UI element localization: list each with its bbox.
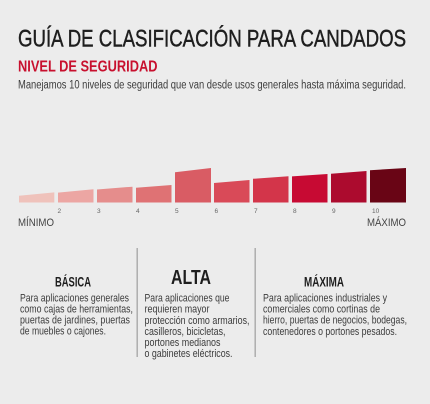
text: básica description <box>20 293 133 338</box>
heading: máxima: MÁXIMA <box>304 275 344 290</box>
text: alta description: o gabinetes eléctricos. <box>144 348 232 360</box>
bar chart: security levels <box>19 168 406 202</box>
level numbers: 10 <box>372 208 380 215</box>
text: alta description: portones medianos <box>144 337 221 349</box>
text: alta description: casilleros, bicicletas, <box>144 326 226 338</box>
level numbers: 6 <box>214 208 218 215</box>
text: alta description: requieren mayor <box>144 304 210 316</box>
divider 1 <box>136 248 138 357</box>
text: máxima description: Para aplicaciones industriales y <box>263 293 387 305</box>
text: alta description: Para aplicaciones que <box>144 293 230 305</box>
label: maximum: MÁXIMO <box>367 216 406 229</box>
subtitle: NIVEL DE SEGURIDAD <box>18 58 158 75</box>
text: básica description: como cajas de herramientas, <box>20 304 133 316</box>
level numbers: 5 <box>175 208 179 215</box>
level numbers: 2 <box>58 208 62 215</box>
text: básica description: Para aplicaciones generales <box>20 293 129 305</box>
panel: máxima <box>263 275 407 338</box>
level numbers: 4 <box>136 208 140 215</box>
level numbers: 7 <box>254 208 258 215</box>
text: alta description <box>144 293 250 360</box>
divider 2 <box>254 248 256 357</box>
panel: básica <box>20 275 133 338</box>
panel: alta <box>144 266 250 360</box>
heading: básica: BÁSICA <box>55 275 91 290</box>
level numbers: 9 <box>332 208 336 215</box>
text: básica description: puertas de jardines, puertas <box>20 314 130 326</box>
text: máxima description: contenedores o portones pesados. <box>263 326 397 338</box>
label: minimum: MÍNIMO <box>18 216 54 229</box>
text: máxima description: comerciales como cortinas de <box>263 304 380 316</box>
text: básica description: de muebles o cajones. <box>20 326 106 338</box>
level numbers: 3 <box>97 208 101 215</box>
level numbers: 8 <box>293 208 297 215</box>
level numbers <box>58 208 380 215</box>
text: alta description: protección como armarios, <box>144 315 250 327</box>
heading: alta: ALTA <box>171 266 211 289</box>
text: máxima description <box>263 293 407 338</box>
